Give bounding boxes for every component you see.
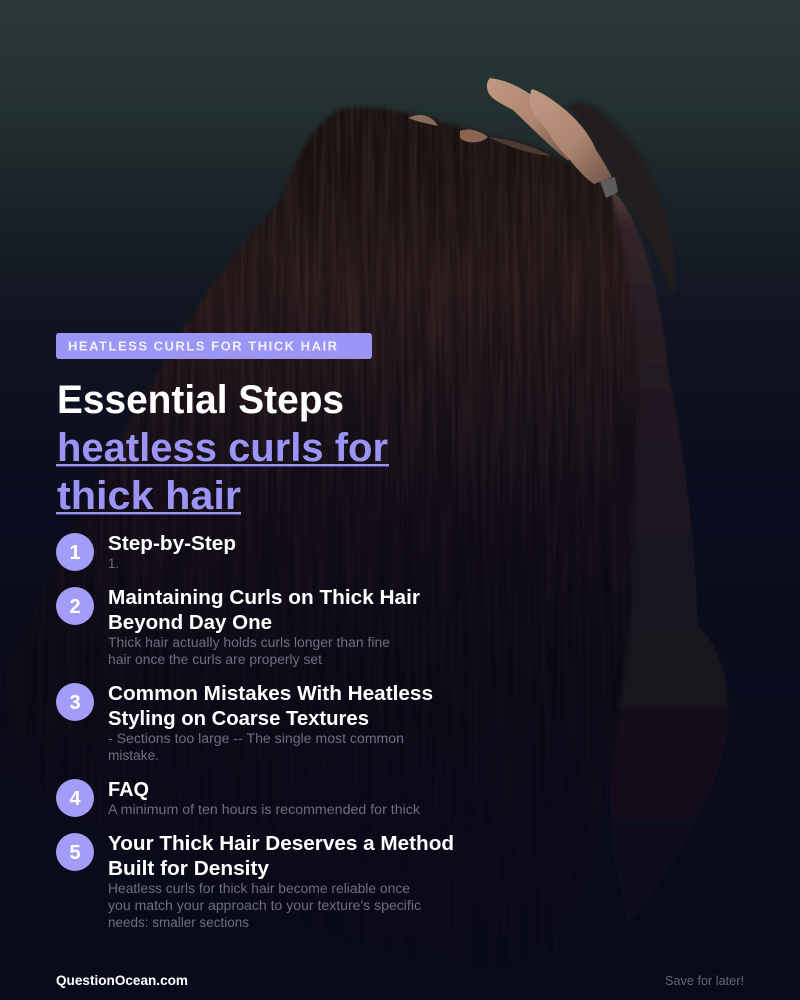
title: thick hair xyxy=(57,474,241,518)
step 2: Thick hair actually holds curls longer than fine xyxy=(108,635,390,650)
step 4: FAQ xyxy=(108,779,149,801)
step 4: A minimum of ten hours is recommended for thick xyxy=(108,802,420,817)
step 1: 1. xyxy=(108,556,119,571)
hair strand texture xyxy=(42,107,638,675)
back hair wisps xyxy=(566,103,675,296)
step 1: Step-by-Step xyxy=(108,533,236,555)
step 5: Heatless curls for thick hair become reliable once xyxy=(108,881,410,896)
step 5: 5 xyxy=(69,842,81,864)
arm and body xyxy=(608,190,729,925)
step 5: Your Thick Hair Deserves a Method xyxy=(108,833,454,855)
hair mass xyxy=(42,106,638,760)
step 4: 4 xyxy=(69,788,81,810)
step 2: 2 xyxy=(69,596,81,618)
step 1 xyxy=(56,533,236,571)
step 5 xyxy=(56,833,454,930)
footer save note: Save for later! xyxy=(665,973,744,988)
step 3 xyxy=(56,683,433,763)
step 5: Built for Density xyxy=(108,858,270,880)
footer brand: QuestionOcean.com xyxy=(56,972,188,988)
step 5: you match your approach to your texture's specific xyxy=(108,898,421,913)
step 2: Beyond Day One xyxy=(108,612,272,634)
tag badge xyxy=(56,333,372,359)
step 3: 3 xyxy=(69,692,81,714)
hand xyxy=(408,78,618,198)
step 5: needs: smaller sections xyxy=(108,915,249,930)
step 3: - Sections too large -- The single most common xyxy=(108,731,404,746)
title xyxy=(56,378,389,518)
step 2: hair once the curls are properly set xyxy=(108,652,322,667)
step 2: Maintaining Curls on Thick Hair xyxy=(108,587,420,609)
title: Essential Steps xyxy=(57,378,344,422)
step 3: Styling on Coarse Textures xyxy=(108,708,369,730)
step 1: 1 xyxy=(69,542,81,564)
title: heatless curls for xyxy=(57,426,388,470)
step 3: mistake. xyxy=(108,748,159,763)
step 2 xyxy=(56,587,420,667)
tag badge: HEATLESS CURLS FOR THICK HAIR xyxy=(68,338,338,354)
step 3: Common Mistakes With Heatless xyxy=(108,683,433,705)
step 4 xyxy=(56,779,420,817)
